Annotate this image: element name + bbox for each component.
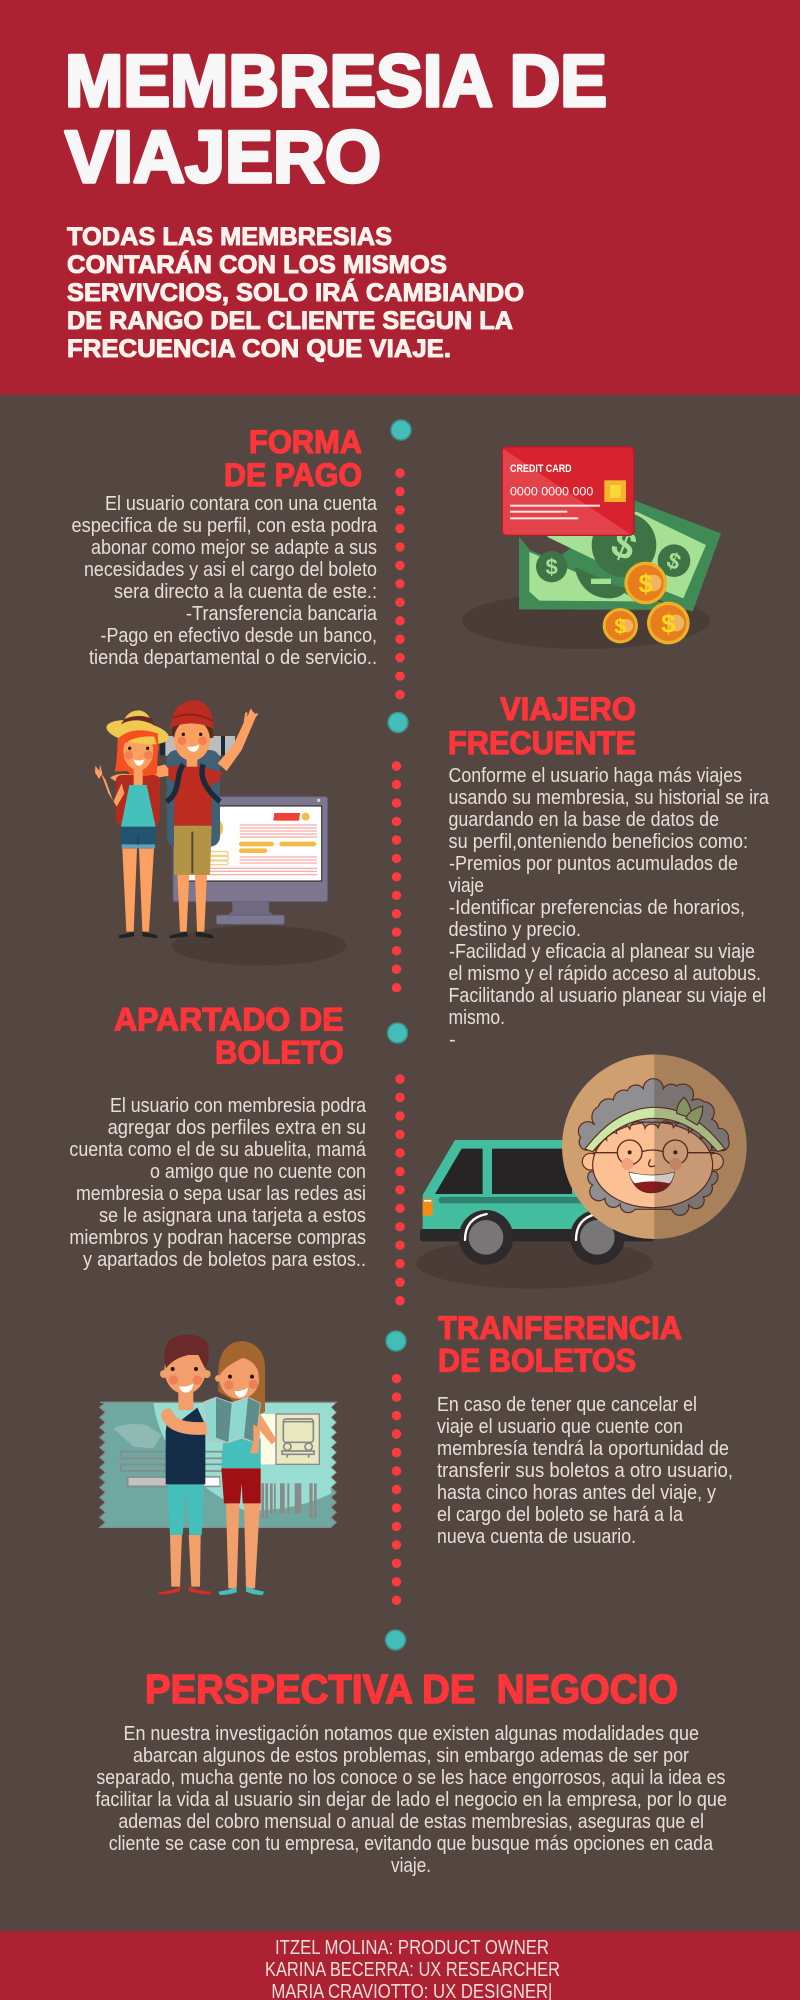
- intro text: SERVIVCIOS, SOLO IRÁ CAMBIANDO: [67, 278, 524, 307]
- illustration: travellers with computer: [95, 700, 346, 966]
- text: tranferencia de boletos: membresía tendrá la oportunidad de: [437, 1438, 729, 1460]
- bus ticket: [100, 1402, 336, 1527]
- text: forma de pago: El usuario contara con una cuenta: [105, 493, 378, 515]
- coins: [603, 562, 690, 644]
- text: perspectiva de negocio: En nuestra investigación notamos que existen algunas modalidades que: [124, 1723, 699, 1745]
- text: viajero frecuente: [448, 765, 770, 1051]
- heading: forma de pago: [224, 424, 362, 493]
- man with backpack: [110, 700, 257, 938]
- text: forma de pago: especifica de su perfil, con esta podra: [72, 515, 378, 537]
- text: tranferencia de boletos: [437, 1394, 733, 1548]
- text: tranferencia de boletos: hasta cinco horas antes del viaje, y: [437, 1482, 716, 1504]
- text: forma de pago: [72, 493, 378, 669]
- heading: tranferencia de boletos: DE BOLETOS: [438, 1342, 636, 1378]
- man: [158, 1335, 212, 1594]
- text: apartado de boleto: se le asignara una tarjeta a estos: [99, 1205, 366, 1227]
- intro text: TODAS LAS MEMBRESIAS: [67, 223, 392, 251]
- intro text: FRECUENCIA CON QUE VIAJE.: [67, 335, 451, 363]
- text: forma de pago: abonar como mejor se adapte a sus: [91, 537, 377, 559]
- coins: $: [661, 608, 676, 638]
- heading: perspectiva de negocio: PERSPECTIVA DE NEGOCIO: [145, 1666, 678, 1712]
- text: apartado de boleto: agregar dos perfiles extra en su: [108, 1117, 366, 1139]
- icon: credit card, bills and coins: [462, 447, 721, 649]
- intro text: DE RANGO DEL CLIENTE SEGUN LA: [67, 307, 513, 335]
- illustration: couple with map and ticket: [100, 1335, 336, 1595]
- coins: $: [638, 568, 653, 598]
- text: perspectiva de negocio: [95, 1723, 727, 1877]
- text: tranferencia de boletos: nueva cuenta de usuario.: [437, 1526, 636, 1548]
- credit card: [502, 447, 634, 535]
- credit card: CREDIT CARD: [510, 463, 572, 475]
- text: tranferencia de boletos: el cargo del boleto se hará a la: [437, 1504, 684, 1526]
- section: perspectiva de negocio: [95, 1666, 727, 1877]
- text: forma de pago: -Pago en efectivo desde un banco,: [100, 625, 377, 647]
- title: VIAJERO: [65, 117, 381, 198]
- heading: viajero frecuente: [448, 691, 636, 761]
- text: viajero frecuente: usando su membresia, su historial se ira: [448, 787, 770, 809]
- credits: ITZEL MOLINA: PRODUCT OWNER: [275, 1937, 549, 1959]
- text: apartado de boleto: cuenta como el de su abuelita, mamá: [69, 1139, 367, 1161]
- grandmother portrait: [562, 1050, 751, 1243]
- text: perspectiva de negocio: cliente se case con tu empresa, evitando que busque más opciones en cada: [109, 1833, 714, 1855]
- text: perspectiva de negocio: abarcan algunos de estos problemas, sin embargo ademas de ser por: [133, 1745, 689, 1767]
- text: apartado de boleto: membresia o sepa usar las redes asi: [76, 1183, 366, 1205]
- text: apartado de boleto: El usuario con membresia podra: [110, 1095, 367, 1117]
- heading: apartado de boleto: BOLETO: [215, 1034, 344, 1070]
- text: tranferencia de boletos: En caso de tener que cancelar el: [437, 1394, 697, 1416]
- heading: forma de pago: FORMA: [249, 424, 362, 460]
- section: transferencia de boletos: [100, 1310, 733, 1595]
- text: tranferencia de boletos: transferir sus boletos a otro usuario,: [437, 1460, 733, 1482]
- credit card: 0000 0000 000: [510, 485, 594, 499]
- heading: apartado de boleto: APARTADO DE: [114, 1002, 344, 1038]
- text: perspectiva de negocio: separado, mucha gente no los conoce o se les hace engorrosos, aqui la idea es: [96, 1767, 725, 1789]
- text: perspectiva de negocio: viaje.: [391, 1855, 431, 1877]
- heading: tranferencia de boletos: [438, 1310, 682, 1378]
- icon: credit card, bills and coins: $: [663, 546, 685, 575]
- footer band: [0, 1931, 800, 2000]
- coins: $: [614, 614, 626, 638]
- section: forma de pago: [72, 424, 721, 669]
- text: viajero frecuente: Conforme el usuario haga más viajes: [448, 765, 742, 787]
- heading: viajero frecuente: VIAJERO: [500, 691, 636, 727]
- section: viajero frecuente: [95, 691, 770, 1051]
- heading: forma de pago: DE PAGO: [224, 457, 362, 493]
- title: MEMBRESIA DE: [65, 41, 607, 122]
- text: forma de pago: -Transferencia bancaria: [186, 603, 378, 625]
- text: viajero frecuente: -Identificar preferencias de horarios,: [449, 897, 745, 919]
- text: tranferencia de boletos: viaje el usuario que cuente con: [437, 1416, 683, 1438]
- credits: [265, 1937, 560, 2000]
- text: apartado de boleto: miembros y podran hacerse compras: [69, 1227, 366, 1249]
- text: perspectiva de negocio: facilitar la vida al usuario sin dejar de lado el negocio en la empresa, por lo que: [95, 1789, 727, 1811]
- folded map: [204, 1398, 260, 1442]
- text: perspectiva de negocio: ademas del cobro mensual o anual de estas membresias, aseguras que el: [118, 1811, 704, 1833]
- text: apartado de boleto: y apartados de boletos para estos..: [83, 1249, 366, 1271]
- heading: viajero frecuente: FRECUENTE: [448, 725, 636, 761]
- timeline: [386, 420, 411, 1650]
- woman with hat: [95, 710, 171, 938]
- intro text: CONTARÁN CON LOS MISMOS: [67, 250, 447, 279]
- intro text: [67, 223, 524, 363]
- text: apartado de boleto: [69, 1095, 367, 1271]
- text: forma de pago: sera directo a la cuenta de este.:: [114, 581, 377, 603]
- text: viajero frecuente: viaje: [448, 875, 484, 897]
- icon: credit card, bills and coins: $: [605, 521, 642, 570]
- text: viajero frecuente: -Facilidad y eficacia al planear su viaje: [449, 941, 755, 963]
- text: viajero frecuente: el mismo y el rápido acceso al autobus.: [448, 963, 761, 985]
- illustration: van and grandmother: [416, 1050, 751, 1289]
- text: viajero frecuente: guardando en la base de datos de: [448, 809, 719, 831]
- section: apartado de boleto: [69, 1002, 751, 1289]
- heading: apartado de boleto: [114, 1002, 344, 1070]
- text: viajero frecuente: -: [449, 1029, 456, 1051]
- credits: KARINA BECERRA: UX RESEARCHER: [265, 1959, 560, 1981]
- title: [65, 41, 607, 198]
- text: forma de pago: necesidades y asi el cargo del boleto: [84, 559, 377, 581]
- text: viajero frecuente: mismo.: [448, 1007, 505, 1029]
- header band: [0, 0, 800, 395]
- heading: tranferencia de boletos: TRANFERENCIA: [438, 1310, 682, 1346]
- text: forma de pago: tienda departamental o de servicio..: [89, 647, 377, 669]
- text: viajero frecuente: Facilitando al usuario planear su viaje el: [448, 985, 766, 1007]
- woman with map: [204, 1341, 277, 1595]
- icon: credit card, bills and coins: $: [546, 555, 558, 580]
- text: viajero frecuente: -Premios por puntos acumulados de: [449, 853, 738, 875]
- text: viajero frecuente: su perfil,onteniendo beneficios como:: [448, 831, 748, 853]
- computer monitor: [173, 797, 328, 924]
- text: apartado de boleto: o amigo que no cuente con: [150, 1161, 366, 1183]
- van: [420, 1140, 654, 1265]
- text: viajero frecuente: destino y precio.: [448, 919, 581, 941]
